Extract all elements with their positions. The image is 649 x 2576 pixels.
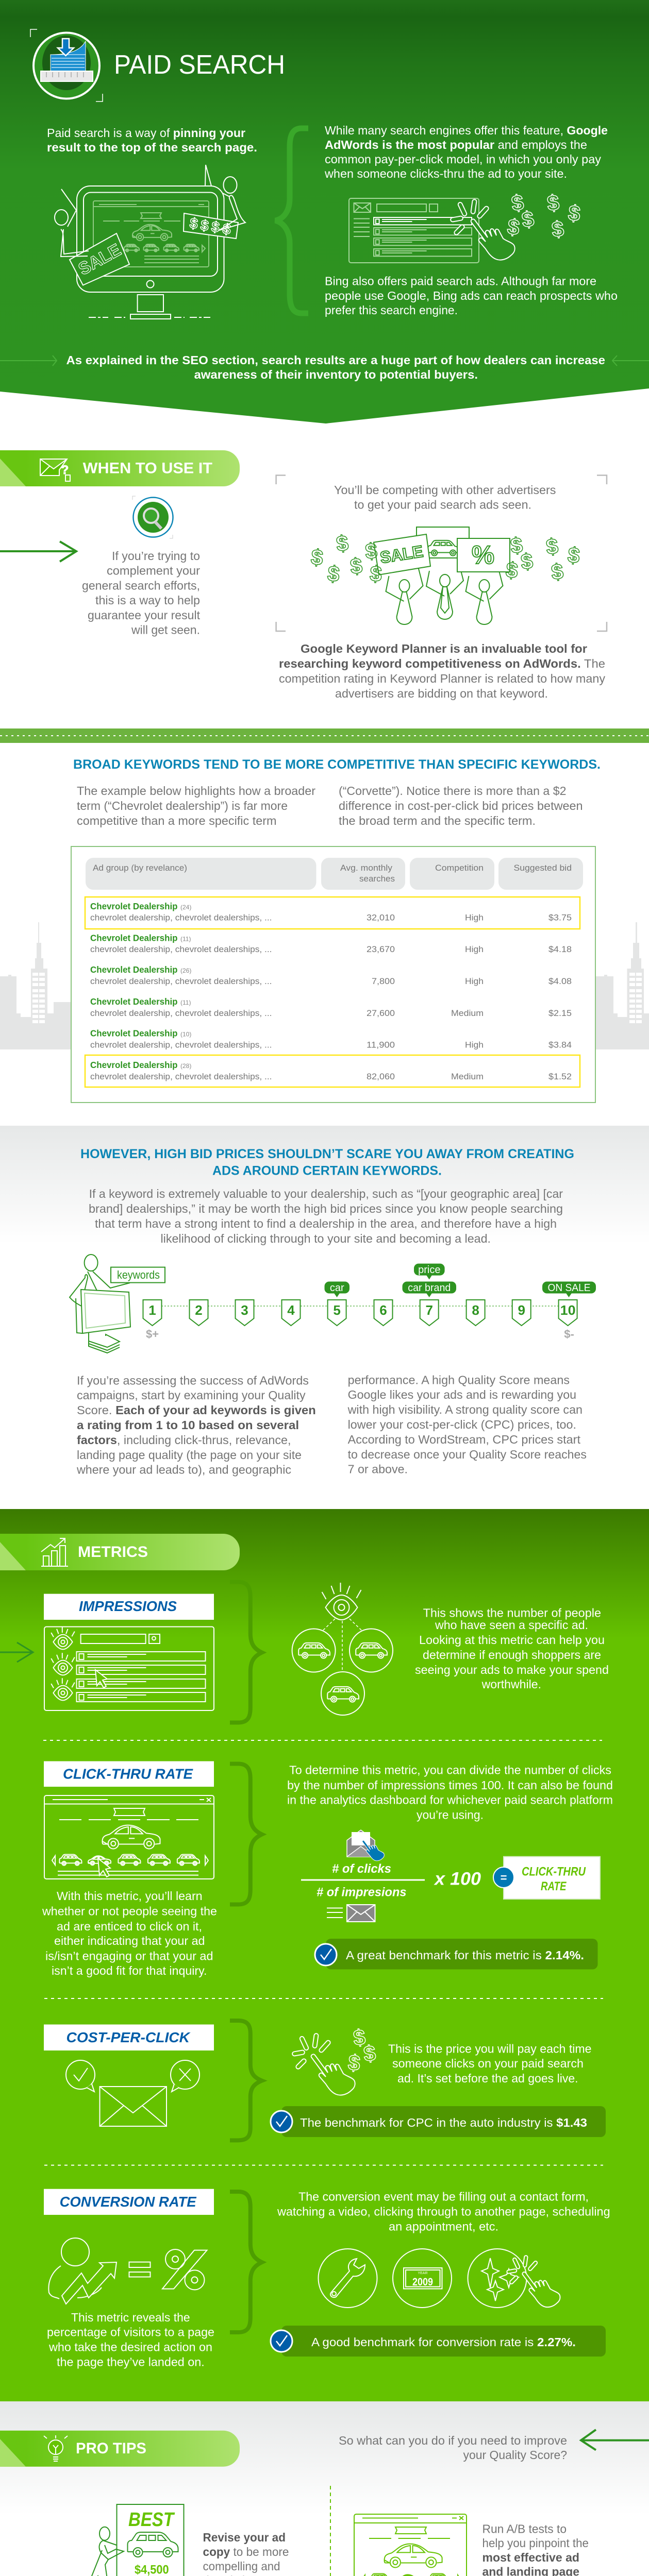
illustration: clicking hand with dollars: $ [347, 2050, 361, 2075]
text: bing: prefer this search engine. [325, 303, 458, 317]
text: google adwords: common pay-per-click model, in which you only pay [325, 152, 602, 166]
panel: when to use it [0, 450, 607, 700]
icons: wrench, calendar, sparkles and hand: 2009 [412, 2276, 433, 2288]
group: impressions [44, 1582, 609, 1723]
text: intro left [47, 126, 257, 154]
text: revise: copy to be more [203, 2545, 289, 2558]
icons: dollar signs [506, 190, 581, 242]
illustration: car listing browser [44, 1795, 214, 1879]
icons: dollar signs: $ [551, 216, 565, 242]
arrow: left into statement [0, 355, 57, 366]
illustration: person holding keywords monitor: keywords [117, 1268, 160, 1281]
icons: green dollar signs: $ [567, 543, 581, 568]
text: impressions: who have seen a specific ad. [435, 1618, 588, 1632]
text: impressions: This shows the number of people [423, 1606, 601, 1620]
text: quality score left [76, 1374, 316, 1477]
text: impressions: determine if enough shoppers are [423, 1648, 601, 1662]
table: keyword bids: 11,900 [367, 1040, 395, 1050]
text: quality score left: campaigns, start by examining your Quality [77, 1388, 306, 1402]
callout: cpc benchmark [271, 2106, 606, 2137]
chart: quality score scale: 3 [241, 1302, 248, 1318]
text: cpc: This is the price you will pay each time [388, 2042, 592, 2056]
chart: quality score scale: 9 [518, 1302, 525, 1318]
table: keyword bids: (26) [180, 967, 191, 974]
text: quality score right: with high visibility. A strong quality score can [347, 1403, 583, 1416]
banner: when to use it [0, 450, 240, 486]
text: improve question [339, 2434, 567, 2462]
illustration: search results with clicking hand [349, 198, 515, 263]
text: google adwords: when someone clicks-thru the ad to your site. [324, 167, 567, 180]
text: example: The example below highlights how a broader [77, 784, 315, 798]
table: keyword bids: Chevrolet Dealership [90, 996, 177, 1007]
icons: green dollar signs [310, 531, 581, 586]
text: run a/b tests: help you pinpoint the [482, 2536, 589, 2550]
text: competing [334, 483, 556, 511]
text: intro left: result to the top of the search page. [47, 141, 257, 154]
callout: ctr benchmark: A great benchmark for this metric is 2.14%. [346, 1948, 584, 1962]
chart: quality score scale: car [330, 1282, 344, 1294]
decorative brace [230, 1764, 262, 1904]
title: PAID SEARCH [114, 50, 285, 80]
text: run a/b tests: Run A/B tests to [482, 2522, 567, 2536]
heading box: conversion rate [44, 2189, 214, 2215]
illustration: clicking hand with dollars: $ [352, 2025, 367, 2050]
text: if you're trying [82, 549, 201, 637]
icons: green dollar signs: $ [335, 531, 350, 556]
heading: HOWEVER, HIGH BID PRICES SHOULDN’T SCARE YOU AWAY FROM CREATING [80, 1147, 574, 1161]
heading box: click-thru rate [44, 1761, 214, 1787]
icons: green dollar signs: $ [349, 553, 363, 579]
table: keyword bids: Chevrolet Dealership [90, 964, 177, 975]
illustration: monitor with ad, sale sign and figures [55, 165, 245, 319]
text: impressions: Looking at this metric can help you [419, 1633, 605, 1647]
text: impressions: seeing your ads to make your spend [415, 1663, 609, 1676]
icons: green dollar signs: $ [364, 538, 378, 564]
text: improve question: So what can you do if you need to improve [339, 2434, 567, 2447]
decorative brace divider [275, 128, 308, 313]
text: example: the broad term and the specific term. [339, 814, 536, 827]
text: valuable keyword: that term have a strong intent to find a dealership in the area, and therefore have a high [95, 1217, 557, 1230]
group: cost-per-click [44, 1998, 606, 2140]
tip: revise ad copy [77, 2504, 289, 2576]
illustration: monitor with ad, sale sign and figures: SALE [75, 240, 124, 279]
table: keyword bids: Suggested bid [513, 863, 572, 873]
text: quality score right: performance. A high Quality Score means [348, 1374, 570, 1387]
table: keyword bids: $4.08 [548, 976, 572, 986]
text: ctr left: ad are enticed to click on it, [57, 1920, 202, 1933]
text: valuable keyword: brand] dealerships,” it may be worth the high bid prices since you know people searching [89, 1202, 563, 1215]
icons: dollar signs: $ [520, 207, 536, 232]
icon: paid search badge [30, 29, 103, 101]
chart: quality score scale: ON SALE [547, 1282, 591, 1294]
text: intro left: Paid search is a way of pinning your [47, 126, 245, 140]
text: competing: to get your paid search ads seen. [354, 498, 531, 511]
chart: quality score scale: 8 [472, 1302, 479, 1318]
table: keyword bids: 23,670 [367, 944, 395, 954]
table: keyword bids: chevrolet dealership, chevrolet dealerships, ... [90, 1008, 272, 1018]
text: improve question: your Quality Score? [463, 2448, 567, 2462]
text: quality score right: According to WordStream, CPC prices start [348, 1433, 581, 1446]
banner: metrics: METRICS [78, 1544, 148, 1561]
illustration: monitor with ad, sale sign and figures: $ [199, 217, 210, 234]
text: example: (“Corvette”). Notice there is more than a $2 [339, 784, 566, 798]
group: click-thru rate [42, 1740, 613, 1977]
text: ctr left: isn’t a good fit for that inquiry. [52, 1964, 207, 1977]
callout: cpc benchmark: The benchmark for CPC in the auto industry is $1.43 [300, 2116, 587, 2129]
icon: magnifier badge [132, 496, 173, 538]
table: keyword bids: $4.18 [548, 944, 572, 954]
text: ctr right: you’re using. [417, 1808, 484, 1822]
chart: ctr formula: # of clicks [332, 1862, 391, 1876]
illustration: person equals percent [48, 2238, 207, 2304]
text: quality score right: 7 or above. [348, 1463, 408, 1476]
text: example [77, 784, 583, 827]
table: keyword bids: Chevrolet Dealership [90, 933, 177, 943]
text: example: term (“Chevrolet dealership”) is far more [77, 799, 288, 812]
text: conversion left: who take the desired action on [48, 2341, 212, 2354]
decorative brace [230, 2192, 262, 2332]
illustration: skyline left [0, 922, 71, 1049]
illustration: monitor with ad, sale sign and figures: $ [222, 221, 232, 238]
panel: pro tips [0, 2401, 649, 2576]
text: quality score left: Score. Each of your ad keywords is given [77, 1403, 316, 1417]
illustration: three figures with signs [374, 527, 510, 624]
table: keyword bids: $3.75 [548, 913, 572, 923]
panel: paid search header [0, 0, 649, 423]
table: keyword bids: (11) [180, 936, 191, 943]
text: conversion left: percentage of visitors to a page [47, 2326, 214, 2339]
decorative brace [230, 2021, 262, 2140]
table: keyword bids: $3.84 [548, 1040, 572, 1050]
banner: when to use it: ? [61, 463, 69, 477]
text: cpc [388, 2042, 592, 2085]
heading box: cost-per-click [44, 2025, 214, 2050]
banner: pro tips [0, 2431, 240, 2467]
panel: high bid prices [0, 1126, 649, 1477]
table: keyword bids: Chevrolet Dealership [90, 1028, 177, 1039]
chart: ctr formula: CLICK-THRU [522, 1865, 586, 1879]
text: conversion right: The conversion event may be filling out a contact form, [298, 2190, 589, 2204]
text: ctr right: by the number of impressions times 100. It can also be found [287, 1778, 613, 1792]
table: keyword bids: Ad group (by revelance) [93, 863, 187, 873]
table: keyword bids: chevrolet dealership, chevrolet dealerships, ... [90, 1072, 272, 1081]
text: valuable keyword: If a keyword is extremely valuable to your dealership, such as “[your geographic area] [car [89, 1187, 563, 1200]
table: keyword bids: (10) [180, 1031, 191, 1038]
text: if you're trying: guarantee your result [88, 608, 201, 622]
table: keyword bids: Medium [451, 1072, 484, 1081]
table: keyword bids: searches [359, 874, 395, 884]
banner: metrics [0, 1534, 240, 1570]
table: keyword bids: Chevrolet Dealership [90, 901, 177, 911]
chart: quality score scale: 2 [195, 1302, 203, 1318]
text: quality score right: Google likes your ads and is rewarding you [348, 1388, 576, 1401]
text: quality score left: where your ad leads to), and geographic [76, 1463, 291, 1477]
text: keyword planner [279, 642, 606, 700]
text: if you're trying: will get seen. [131, 623, 200, 637]
text: keyword planner: advertisers are bidding on that keyword. [335, 687, 548, 700]
illustration: best poster with figure: BEST [128, 2509, 175, 2531]
decorative brace [230, 1582, 262, 1723]
group: conversion rate [44, 2165, 610, 2369]
arrow: right into statement [612, 355, 649, 366]
decorative stitched band [0, 728, 649, 743]
text: conversion right: an appointment, etc. [389, 2220, 498, 2233]
icons: dollar signs: $ [567, 200, 581, 226]
text: quality score right [347, 1374, 587, 1476]
text: impressions: worthwhile. [481, 1677, 541, 1691]
chart: quality score scale: 1 [148, 1302, 156, 1318]
arrow: green [0, 541, 76, 562]
text: bing: Bing also offers paid search ads. Although far more [325, 274, 596, 287]
text: quality score left: If you’re assessing the success of AdWords [77, 1374, 309, 1387]
illustration: three figures with signs: % [472, 540, 494, 569]
table: keyword bids: chevrolet dealership, chevrolet dealerships, ... [90, 944, 272, 954]
illustration: search results with eyes [44, 1627, 214, 1710]
illustration: monitor with ad, sale sign and figures: $ [189, 215, 199, 232]
text: ctr left [42, 1889, 217, 1977]
decorative corner marks [276, 475, 607, 631]
heading box: impressions: IMPRESSIONS [79, 1598, 177, 1614]
text: bing: people use Google, Bing ads can reach prospects who [325, 289, 618, 302]
text: if you're trying: complement your [107, 564, 200, 578]
heading: BROAD KEYWORDS TEND TO BE MORE COMPETITIVE THAN SPECIFIC KEYWORDS. [73, 757, 601, 772]
chart: quality score scale: price [418, 1264, 440, 1276]
text: example: difference in cost-per-click bid prices between [339, 799, 583, 812]
illustration: monitor with ad, sale sign and figures: $ [210, 218, 221, 235]
text: cpc: someone clicks on your paid search [392, 2057, 584, 2070]
icons: green dollar signs: $ [310, 545, 324, 570]
chart: quality score scale: 5 [333, 1302, 341, 1318]
callout: conversion benchmark: A good benchmark for conversion rate is 2.27%. [311, 2335, 576, 2349]
icons: green dollar signs: $ [520, 549, 534, 574]
icons: green dollar signs: $ [369, 561, 382, 586]
arrow: green left [581, 2430, 649, 2450]
table: keyword bids: 82,060 [367, 1072, 395, 1081]
text: quality score right: to decrease once your Quality Score reaches [348, 1448, 587, 1461]
text: google adwords [324, 124, 608, 180]
illustration: person holding keywords monitor [70, 1255, 165, 1353]
text: conversion right: watching a video, clicking through to another page, scheduling [277, 2205, 610, 2218]
table: keyword bids: Competition [435, 863, 484, 873]
heading box: conversion rate: CONVERSION RATE [60, 2194, 197, 2210]
arrow: into impressions [0, 1642, 33, 1662]
text: cpc: ad. It’s set before the ad goes live. [397, 2072, 578, 2085]
illustration: skyline right [595, 922, 649, 1049]
chart: ctr formula: = [501, 1871, 507, 1884]
icons: dollar signs: $ [510, 190, 525, 215]
illustration: clicking hand with dollars [292, 2025, 377, 2095]
text: revise: compelling and [203, 2560, 280, 2573]
table: keyword bids: 27,600 [367, 1008, 395, 1018]
illustration: best poster with figure [77, 2504, 184, 2576]
chart: ctr formula: # of impresions [317, 1886, 406, 1899]
panel: metrics [0, 1509, 649, 2401]
table: keyword bids: chevrolet dealership, chevrolet dealerships, ... [90, 976, 272, 986]
table: keyword bids: chevrolet dealership, chevrolet dealerships, ... [90, 1040, 272, 1050]
table: keyword bids: 7,800 [372, 976, 395, 986]
text: conversion right [277, 2190, 610, 2233]
text: ctr right: in the analytics dashboard for whichever paid search platform [287, 1793, 613, 1806]
text: run a/b tests [482, 2522, 589, 2576]
text: if you're trying: general search efforts, [82, 579, 200, 592]
heading box: impressions [44, 1594, 214, 1620]
table: keyword bids: 32,010 [367, 913, 395, 923]
icons: dollar signs: $ [506, 214, 521, 240]
callout: conversion benchmark [271, 2326, 606, 2357]
text: revise: Revise your ad [203, 2531, 286, 2544]
table: keyword bids: chevrolet dealership, chevrolet dealerships, ... [90, 913, 272, 923]
illustration: clicking hand with dollars: $ [362, 2041, 377, 2066]
text: ctr left: is/isn’t engaging or that your ad [45, 1950, 213, 1963]
table: keyword bids: (28) [180, 1062, 191, 1070]
text: revise [203, 2531, 289, 2576]
chart: quality score scale: 7 [425, 1302, 433, 1318]
text: ctr right: To determine this metric, you can divide the number of clicks [289, 1764, 611, 1777]
icons: dollar signs: $ [546, 190, 560, 215]
banner: when to use it: WHEN TO USE IT [83, 460, 212, 477]
table: keyword bids: $1.52 [548, 1072, 572, 1081]
text: conversion left [47, 2311, 214, 2369]
heading box: cost-per-click: COST-PER-CLICK [66, 2029, 191, 2045]
table: keyword bids: Chevrolet Dealership [90, 1060, 177, 1070]
icons: green dollar signs: $ [550, 559, 564, 584]
chart: ctr formula: RATE [541, 1879, 567, 1893]
illustration: email with approve and reject bubbles [66, 2060, 199, 2126]
chart: quality score scale: 6 [379, 1302, 387, 1318]
chart: quality score scale: $+ [146, 1328, 159, 1341]
chart: quality score scale: $- [564, 1328, 574, 1341]
chart: ctr formula: x 100 [434, 1869, 481, 1889]
callout: ctr benchmark [315, 1939, 598, 1969]
table: keyword bids: High [465, 913, 484, 923]
text: quality score right: lower your cost-per-click (CPC) prices, too. [348, 1418, 576, 1431]
icons: green dollar signs: $ [505, 557, 519, 583]
heading: ADS AROUND CERTAIN KEYWORDS. [212, 1163, 442, 1178]
text: if you're trying: this is a way to help [95, 594, 200, 607]
icons: wrench, calendar, sparkles and hand: YEAR [418, 2272, 428, 2275]
text: conversion left: the page they’ve landed on. [57, 2355, 205, 2369]
text: statement: As explained in the SEO section, search results are a huge part of how dealers can increase [66, 353, 605, 367]
table: keyword bids: High [465, 1040, 484, 1050]
banner: pro tips: PRO TIPS [76, 2440, 146, 2457]
heading [80, 1147, 574, 1178]
text: statement [66, 353, 605, 381]
text: keyword planner: competition rating in Keyword Planner is related to how many [279, 672, 606, 685]
text: statement: awareness of their inventory to potential buyers. [194, 368, 478, 381]
table: keyword bids [71, 846, 595, 1103]
text: example: competitive than a more specific term [77, 814, 276, 827]
chart: quality score scale: 4 [287, 1302, 295, 1318]
text: valuable keyword [89, 1187, 563, 1245]
text: quality score left: landing page quality (the page on your site [77, 1448, 302, 1462]
icons: wrench, calendar, sparkles and hand [319, 2249, 560, 2308]
text: quality score left: a rating from 1 to 10 based on several [77, 1418, 299, 1432]
text: ctr right [287, 1764, 613, 1822]
icons: green dollar signs: $ [509, 533, 524, 558]
text: impressions [415, 1606, 609, 1691]
text: keyword planner: researching keyword competitiveness on AdWords. The [279, 657, 605, 670]
text: google adwords: While many search engines offer this feature, Google [325, 124, 608, 137]
illustration: eye viewing cars [292, 1583, 393, 1715]
panel: broad keywords [0, 757, 649, 1103]
table: keyword bids: Avg. monthly [340, 863, 393, 873]
text: competing: You’ll be competing with other advertisers [334, 483, 556, 497]
table: keyword bids: Medium [451, 1008, 484, 1018]
chart: quality score scale [143, 1264, 596, 1341]
icons: green dollar signs: $ [545, 534, 559, 559]
table: keyword bids: (11) [180, 999, 191, 1006]
text: ctr left: whether or not people seeing the [42, 1905, 217, 1918]
chart: ctr formula [301, 1830, 600, 1922]
tip: a/b tests [354, 2514, 589, 2576]
text: valuable keyword: likelihood of clicking through to your site and becoming a lead. [161, 1232, 491, 1245]
text: if you're trying: If you’re trying to [112, 549, 200, 563]
text: run a/b tests: most effective ad [482, 2551, 579, 2564]
text: google adwords: AdWords is the most popular and employs the [325, 138, 587, 151]
icons: green dollar signs: $ [326, 561, 341, 586]
table: keyword bids: $2.15 [548, 1008, 572, 1018]
illustration: landing page browser [354, 2514, 467, 2576]
text: ctr left: either indicating that your ad [54, 1934, 205, 1947]
table: keyword bids: (24) [180, 904, 191, 911]
text: quality score left: factors, including click-thrus, relevance, [77, 1433, 291, 1447]
text: keyword planner: Google Keyword Planner is an invaluable tool for [301, 642, 587, 655]
heading box: click-thru rate: CLICK-THRU RATE [63, 1766, 193, 1782]
text: conversion left: This metric reveals the [71, 2311, 190, 2324]
chart: quality score scale: 10 [560, 1302, 576, 1318]
illustration: three figures with signs: SALE [379, 542, 424, 567]
chart: quality score scale: car brand [408, 1282, 451, 1294]
table: keyword bids: High [465, 976, 484, 986]
text: bing [325, 274, 618, 317]
table: keyword bids: High [465, 944, 484, 954]
text: ctr left: With this metric, you’ll learn [57, 1889, 203, 1903]
